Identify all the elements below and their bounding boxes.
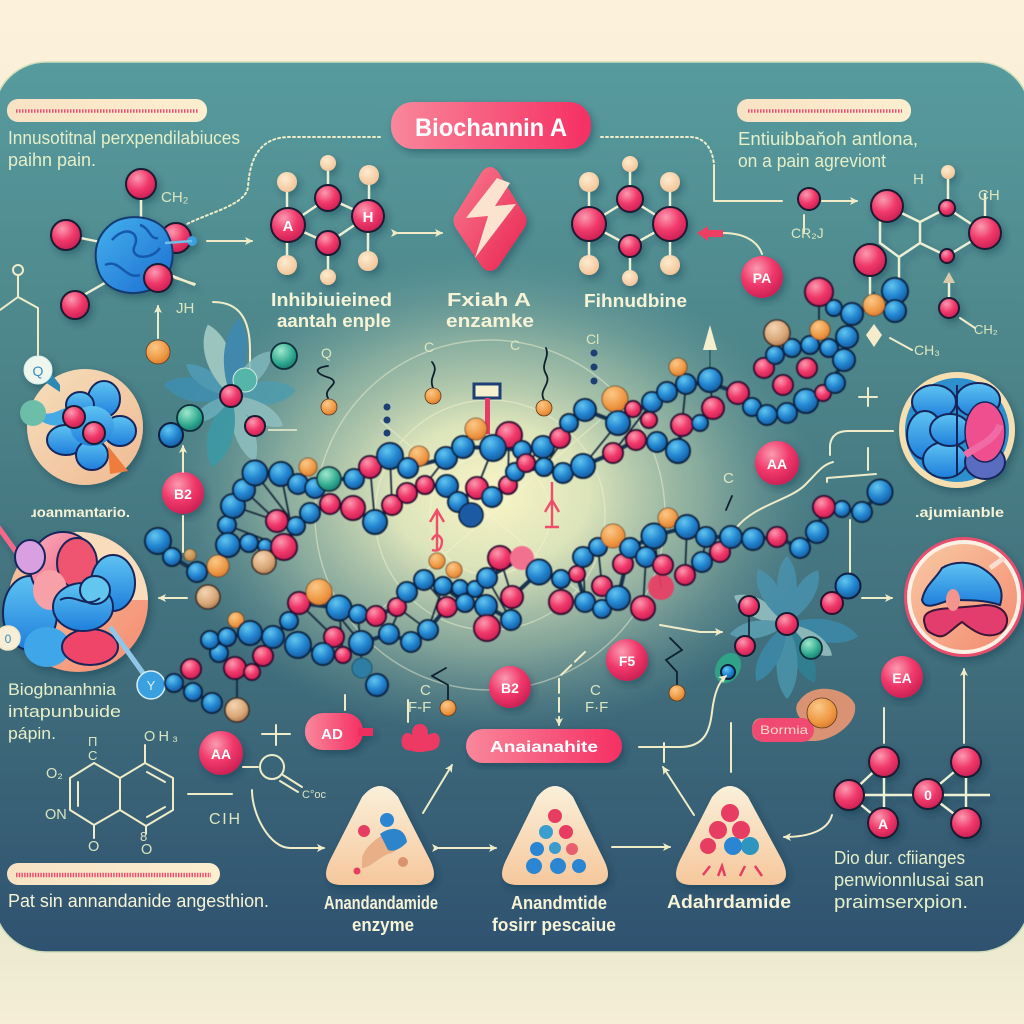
arrows near B2: [159, 446, 187, 598]
icon: small orange atom: [146, 340, 170, 364]
text block: lower left: Biogbnanhnia: [8, 680, 117, 699]
arrows near top-left node: [0, 241, 252, 372]
helix: upper strand: [145, 358, 835, 609]
label: enzyme triangle: Anandandamide: [324, 893, 438, 913]
stem labels: lower: C: [723, 470, 734, 487]
label: dots triangle: Anandmtide: [511, 893, 607, 913]
label: Fihnudbine: Fihnudbine: [584, 291, 687, 311]
badge: EA: EA: [892, 670, 912, 686]
icon: pink flower: [402, 724, 440, 752]
chemical labels: top-left node: CH₂: [161, 189, 189, 206]
chemical structure: bottom left: ON: [45, 807, 67, 823]
icon: lightning diamond: [454, 167, 526, 271]
title badge: [391, 102, 591, 149]
badge: AA right: [755, 441, 799, 485]
badge: AA right: AA: [767, 456, 787, 472]
flower: lower right: [710, 556, 860, 699]
chemical structure: bottom left: O₂: [46, 766, 63, 782]
badge: B2 bottom: B2: [501, 680, 519, 696]
helix: top-right tail: [743, 278, 908, 425]
helix: lower strand: [165, 480, 892, 722]
chemical labels: top right: CH₃: [914, 342, 940, 358]
text block: bottom right: Dio dur. cfiianges: [834, 848, 965, 868]
text block: bottom right: [834, 848, 984, 912]
chemical structure: bottom left: OH₃: [144, 729, 178, 745]
stem labels above helix: C: [510, 337, 520, 353]
molecule: top-left brain node: [51, 169, 197, 319]
text block: top left: [8, 128, 240, 170]
text block: top right: [738, 129, 918, 171]
badge: AA bottom-left: AA: [211, 746, 231, 762]
stem labels above helix: C: [424, 339, 434, 355]
circle: right brain: [899, 372, 1015, 488]
stem labels above helix: Q: [321, 345, 332, 361]
chemical structure: bottom left: O: [141, 842, 152, 858]
badge: PA: [741, 256, 783, 298]
label: inhibited: Inhibiuieined: [271, 290, 392, 310]
text block: top left: paihn pain.: [8, 150, 96, 170]
node: small red atom: [798, 188, 820, 210]
chemical labels: top right: H: [913, 171, 924, 188]
chemical labels: top-left node: [161, 189, 194, 317]
text block: bottom right: penwionnlusai san: [834, 870, 984, 890]
arrow: up triangle: [703, 325, 717, 376]
top-left label bar: [7, 99, 207, 122]
label: enzyme: enzamke: [446, 311, 534, 331]
stem labels above helix: [318, 331, 599, 436]
flower: upper left: [159, 317, 297, 471]
small label by lens: C°oc: [302, 789, 326, 801]
badge: F5: [606, 639, 648, 681]
molecule: inhibited ring: A: [283, 218, 294, 235]
link: blue probe to atom: 0: [5, 632, 12, 646]
label: enzyme: [446, 290, 534, 331]
badge: PA: PA: [753, 270, 771, 286]
molecule: top-right hexagon: [854, 165, 1001, 318]
text block: bottom right: praimserxpion.: [834, 892, 968, 912]
label: enzyme: Fxiah A: [447, 290, 531, 310]
small ticks and diamond right: [866, 272, 975, 350]
bottom-left label bar: [7, 863, 220, 885]
molecule: lower right: A: [878, 816, 888, 832]
chemical labels: top right: CH₂: [974, 322, 998, 337]
label: dots triangle: fosirr pescaiue: [492, 915, 616, 935]
small ring atom top-left: [13, 265, 23, 275]
link: blue probe to atom: [0, 626, 165, 699]
connector: AA lens: [243, 625, 964, 848]
stem labels: lower: C: [590, 682, 601, 699]
badge: B2 left: B2: [174, 486, 192, 502]
double arrow: [398, 232, 442, 234]
pill: Bormia with orange blob: [752, 689, 855, 742]
triangle: enzyme: [326, 786, 434, 885]
right "+" mark: [859, 388, 877, 406]
badge: EA: [881, 656, 923, 698]
chemical labels: top-left node: JH: [176, 300, 194, 317]
chemical structure: bottom left: C: [88, 748, 97, 763]
chemical structure: bottom left: CIH: [209, 811, 240, 828]
chemical structure: bottom left: [45, 729, 240, 858]
chemical structure: bottom left: O: [88, 839, 99, 855]
label: right caption: .ajumianble: [915, 504, 1004, 520]
pill: Anaianahite: Anaianahite: [490, 739, 598, 756]
triangle: cluster: [676, 786, 786, 885]
chemical labels: top right: CH: [978, 187, 1000, 204]
circle: left brain close-up: [20, 356, 143, 485]
circle: left brain close-up: Q: [33, 363, 44, 379]
chemical structure: bottom left: Π: [88, 734, 97, 749]
badge: B2 left: [162, 472, 204, 514]
title badge: Biochannin A: [415, 114, 567, 142]
stem labels: lower: [408, 470, 734, 716]
text block: lower left: [8, 680, 121, 743]
badge: AA bottom-left: [199, 731, 243, 775]
stem labels: lower: C: [420, 682, 431, 699]
text block: lower left: pápin.: [8, 724, 56, 743]
badge: B2 bottom: [489, 666, 531, 708]
stem labels: lower: F·F: [585, 699, 608, 716]
label: inhibited: aantah enple: [277, 311, 391, 331]
triangle: dots: [502, 786, 608, 885]
arrows: right swoosh: [737, 431, 893, 598]
chemical structure: bottom left: 8: [140, 829, 147, 844]
central glow with concentric arcs: [160, 255, 820, 735]
connector to right molecule: [714, 165, 857, 232]
text block: lower left: intapunbuide: [8, 702, 121, 721]
label: dots triangle: [492, 893, 616, 935]
stem labels above helix: Cl: [586, 331, 599, 347]
text block: top left: Innusotitnal perxpendilabiuces: [8, 128, 240, 148]
pill: AD: [305, 713, 373, 750]
stem labels: lower: F-F: [408, 699, 431, 716]
molecule: inhibited ring: H: [363, 209, 373, 226]
badge: F5: F5: [619, 653, 635, 669]
label: inhibited: [271, 290, 392, 331]
molecule: lower right: 0: [924, 787, 932, 803]
molecule: inhibited ring: [271, 155, 384, 285]
text block: top right: on a pain agreviont: [738, 151, 886, 171]
top-right label bar: [737, 99, 911, 122]
label: CR2J: CR₂J: [791, 225, 824, 241]
pill: AD: AD: [321, 726, 343, 743]
text block: top right: Entiuibbaňoh antlona,: [738, 129, 918, 149]
circle: left big brain: [0, 524, 148, 672]
circle: right lower brain: [904, 537, 1024, 657]
pill: Anaianahite: [466, 729, 622, 763]
label: cluster triangle: Adahrdamide: [667, 892, 791, 912]
pill: Bormia with orange blob: Bormia: [760, 723, 808, 737]
chemical labels: top right: [913, 171, 1000, 358]
centre red arrows: [430, 482, 559, 551]
label: enzyme triangle: enzyme: [352, 915, 414, 935]
dotted connectors from title: [185, 137, 714, 225]
molecule: second ring: [572, 156, 687, 286]
label: left caption: ɹoanmantario.: [31, 504, 130, 520]
molecule: lower right: [834, 747, 990, 838]
arrow: red pointer with PA link: [697, 226, 762, 254]
link: blue probe to atom: Y: [147, 678, 156, 693]
text block: bottom left: Pat sin annandanide angesthion.: [8, 891, 269, 911]
label: enzyme triangle: [324, 893, 438, 935]
